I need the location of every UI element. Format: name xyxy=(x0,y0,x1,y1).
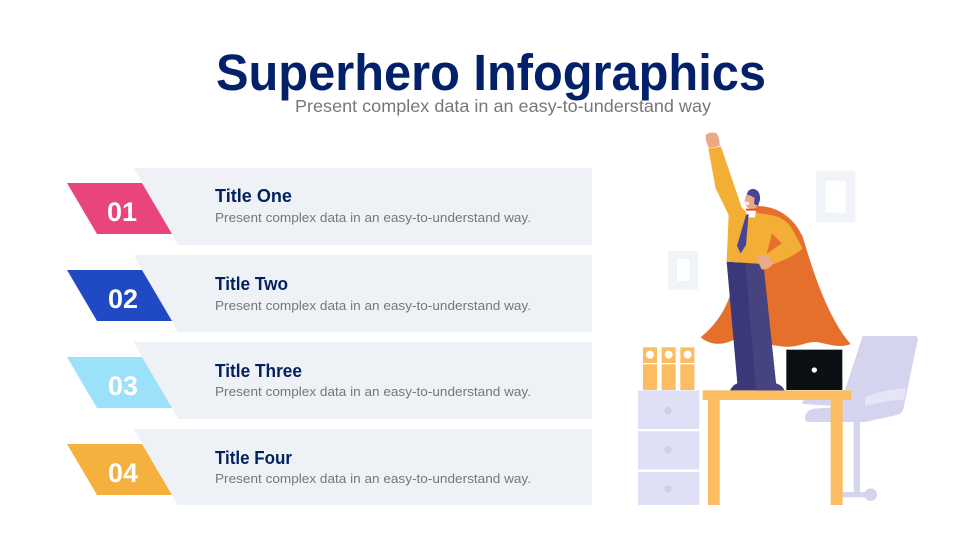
filing cabinet xyxy=(638,390,699,505)
number badge 02: 02 xyxy=(108,284,138,314)
description 3: Present complex data in an easy-to-understand way. xyxy=(215,384,531,399)
title: Superhero Infographics xyxy=(216,44,766,101)
wall frame small xyxy=(668,251,698,290)
number badge 01: 01 xyxy=(107,197,137,227)
number badge 04 xyxy=(67,444,172,495)
panel: item 2 xyxy=(67,255,592,332)
head xyxy=(745,189,760,211)
heading: Title Two: Title Two xyxy=(215,273,288,294)
hand on hip xyxy=(757,254,773,270)
number badge 01 xyxy=(67,183,172,234)
subtitle: Present complex data in an easy-to-understand way xyxy=(295,96,711,116)
laptop xyxy=(786,350,842,390)
description 4: Present complex data in an easy-to-understand way. xyxy=(215,471,531,486)
fist xyxy=(706,132,720,148)
legs xyxy=(727,262,784,390)
number badge 02 xyxy=(67,270,172,321)
panel background 2 xyxy=(134,255,592,332)
heading: Title Four: Title Four xyxy=(215,447,292,468)
shirt collar xyxy=(746,211,756,217)
panel background 3 xyxy=(134,342,592,419)
number badge 03 xyxy=(67,357,172,408)
panel background 1 xyxy=(134,168,592,245)
description 2: Present complex data in an easy-to-understand way. xyxy=(215,298,531,313)
raised arm and torso xyxy=(708,147,803,265)
wall frame large xyxy=(816,171,855,223)
heading: Title Three: Title Three xyxy=(215,360,302,381)
tie xyxy=(737,214,749,253)
number badge 03: 03 xyxy=(108,371,138,401)
panel background 4 xyxy=(134,429,592,505)
illustration: superhero on desk xyxy=(638,132,918,505)
cape gap at hip xyxy=(767,233,782,254)
panel: item 4 xyxy=(67,429,592,505)
cape xyxy=(701,206,851,347)
description 1: Present complex data in an easy-to-understand way. xyxy=(215,210,531,225)
desk xyxy=(703,390,851,505)
binders xyxy=(643,347,694,390)
panel: item 3 xyxy=(67,342,592,419)
chair xyxy=(803,336,918,501)
heading: Title One: Title One xyxy=(215,185,292,206)
panel: item 1 xyxy=(67,168,592,245)
number badge 04: 04 xyxy=(108,458,138,488)
